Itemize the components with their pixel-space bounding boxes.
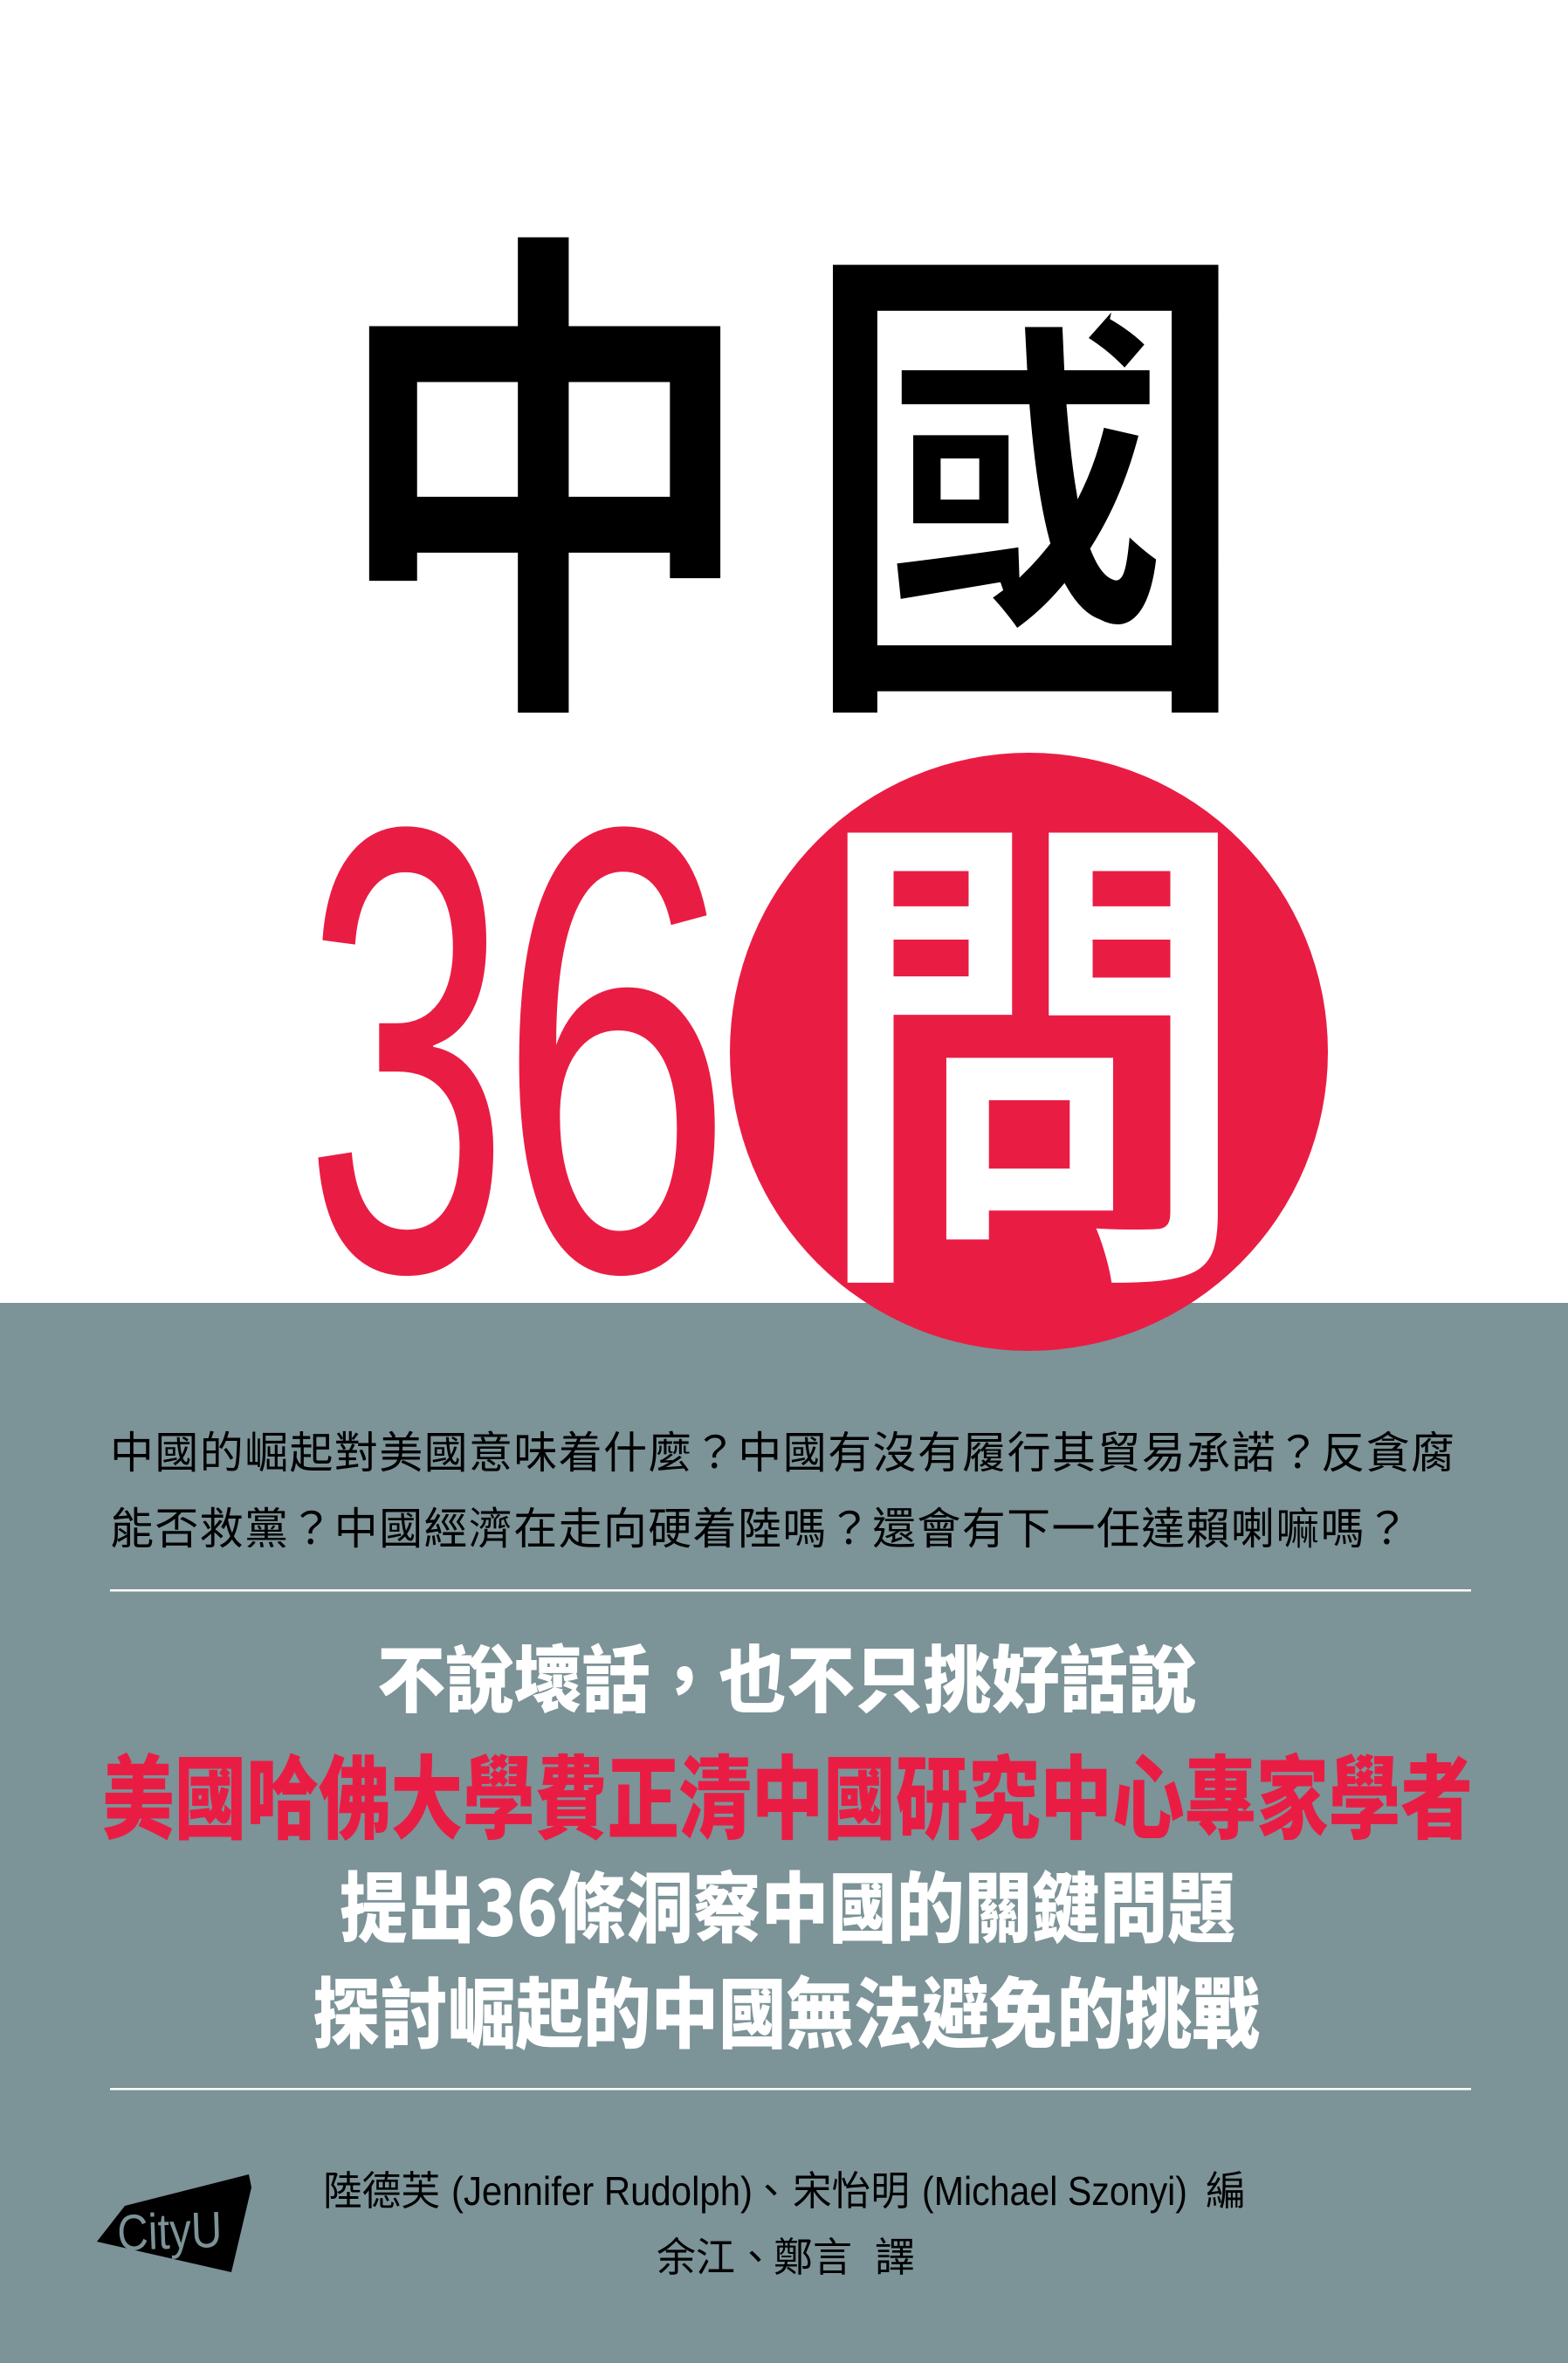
translators credit: 譯	[875, 2226, 915, 2284]
headline block	[102, 1622, 1473, 2064]
title number: 36	[304, 696, 733, 1405]
translators credit: 鄭言	[774, 2226, 852, 2284]
editors credit: 編	[1206, 2160, 1246, 2217]
translators credit: 、	[735, 2226, 775, 2284]
title: 中國	[330, 77, 1255, 816]
red circle	[730, 753, 1328, 1351]
logo: CityU: CityU	[116, 2201, 223, 2262]
upper divider	[110, 1589, 1471, 1591]
translators credit	[657, 2226, 915, 2284]
intro text block	[110, 1418, 1455, 1557]
title: 中國: 國	[796, 81, 1255, 816]
editors credit	[323, 2160, 1246, 2217]
editors credit: (Michael Szonyi)	[922, 2168, 1187, 2214]
headline line 3: 提出36條洞察中國的關鍵問題	[340, 1848, 1235, 1959]
editors credit: 宋怡明	[793, 2160, 910, 2217]
title: 問 in circle: 問	[808, 651, 1254, 1388]
editors credit: 陸德芙	[323, 2160, 440, 2217]
title number: 36: 3	[304, 697, 510, 1405]
headline line 4: 探討崛起的中國無法避免的挑戰	[313, 1953, 1260, 2064]
title number: 36: 6	[498, 696, 733, 1405]
translators credit: 余江	[657, 2226, 735, 2284]
headline line 1: 不說壞話，也不只挑好話說	[377, 1622, 1196, 1728]
logo: CityU	[97, 2174, 251, 2272]
editors credit: (Jennifer Rudolph)	[451, 2168, 753, 2214]
title: 中國: 中	[330, 77, 759, 816]
intro text block: 能否救黨？中國經濟在走向硬着陸嗎？還會有下一任達賴喇嘛嗎？	[110, 1494, 1409, 1557]
lower divider	[110, 2088, 1471, 2091]
grey-blue lower panel	[0, 1303, 1568, 2363]
editors credit: 、	[751, 2160, 791, 2217]
intro text block: 中國的崛起對美國意味着什麼？中國有沒有履行其貿易承諾？反貪腐	[110, 1418, 1455, 1481]
